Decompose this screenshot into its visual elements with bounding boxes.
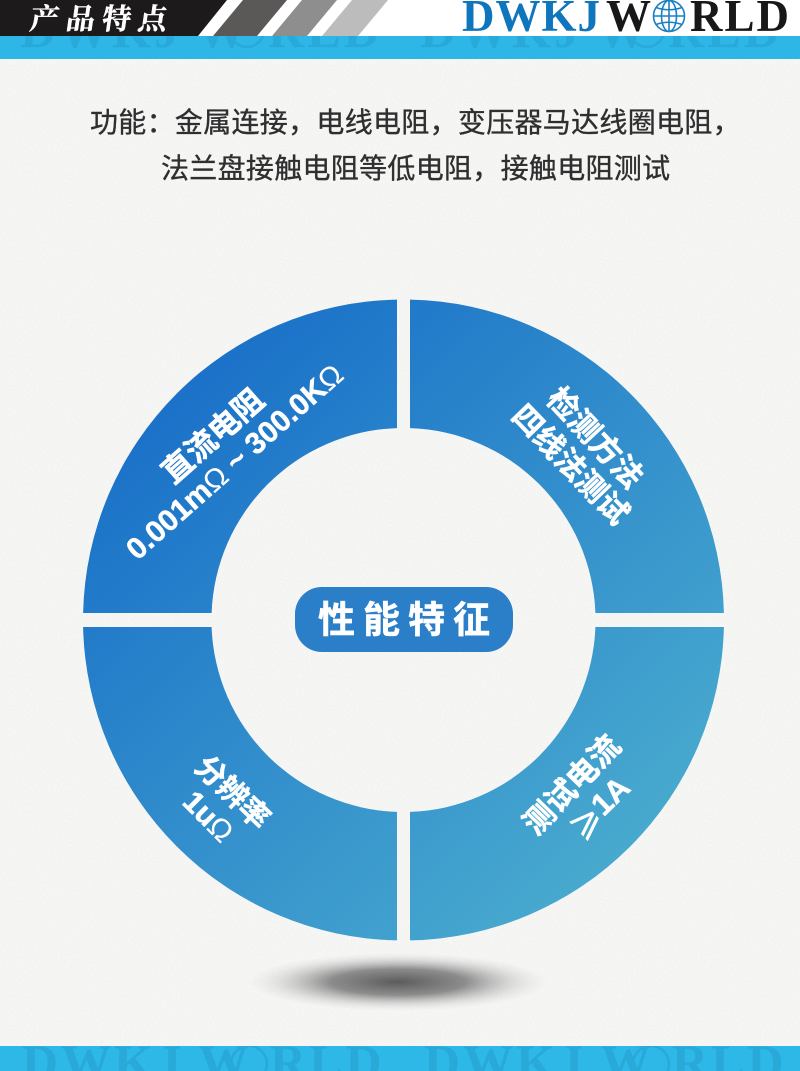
center pill: performance features <box>295 587 513 652</box>
bottom blue band with watermark <box>0 1046 800 1071</box>
ring drop shadow <box>248 953 548 1011</box>
segment: test method: 四线法测试 <box>505 398 635 532</box>
segment: test current: ⩾1A <box>559 767 639 847</box>
segment: DC resistance: 直流电阻 <box>155 382 271 490</box>
segment: resolution <box>83 627 397 940</box>
top blue band with watermark: RLD <box>668 2 783 58</box>
top blue band with watermark: DWKJ W <box>20 2 250 58</box>
segment: test method: 检测方法 <box>540 381 650 495</box>
segment: resolution: 1uΩ <box>176 785 240 849</box>
top blue band with watermark: DWKJ W <box>420 2 650 58</box>
panel: ring chart <box>83 300 724 940</box>
logo: DWKJ WORLD <box>462 0 791 41</box>
segment: test method <box>410 300 724 613</box>
segment: DC resistance <box>83 300 397 613</box>
top blue band with watermark <box>0 36 800 59</box>
function description text: 功能：金属连接，电线电阻，变压器马达线圈电阻， <box>90 107 741 138</box>
segment: test current: 测试电流 <box>516 728 628 842</box>
header strip <box>0 0 800 36</box>
segment: resolution: 分辨率 <box>188 750 276 836</box>
segment: test current <box>410 627 724 940</box>
top blue band with watermark: RLD <box>268 2 383 58</box>
segment: DC resistance: 0.001mΩ ~ 300.0KΩ <box>120 358 350 566</box>
center pill: performance features: 性能特征 <box>318 600 498 640</box>
function description text <box>90 107 741 184</box>
function description text: 法兰盘接触电阻等低电阻，接触电阻测试 <box>161 153 670 184</box>
icon: globe <box>654 0 684 32</box>
